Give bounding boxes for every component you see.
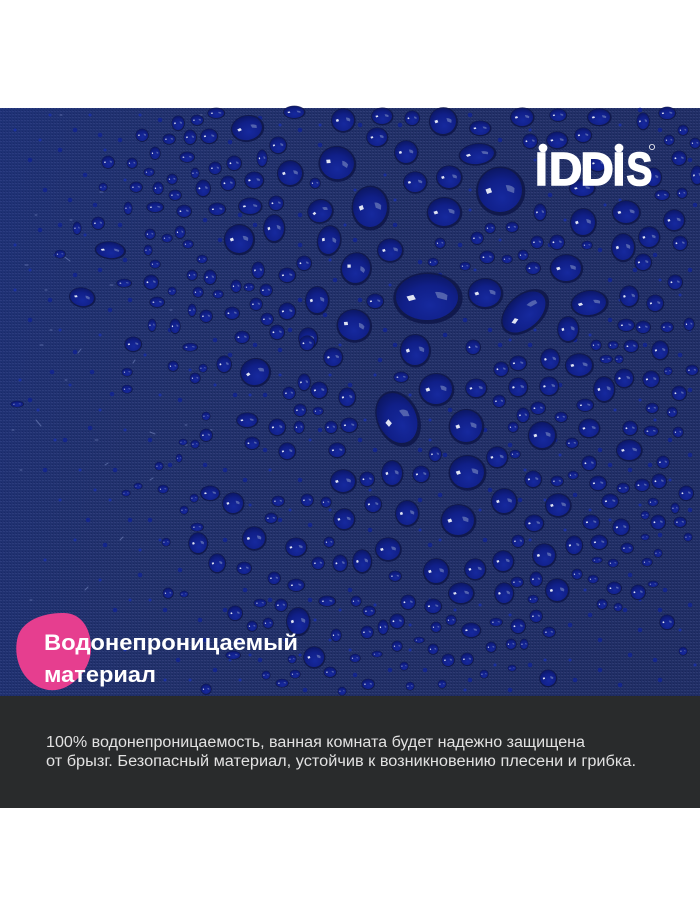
dark description panel [0,696,700,808]
pink accent blob [16,613,91,690]
heading: материал [44,662,156,687]
logo: IDDIS: S [626,144,652,195]
description text: 100% водонепроницаемость, ванная комната будет надежно защищена [46,734,585,751]
description text: от брызг. Безопасный материал, устойчив к возникновению плесени и грибка. [46,753,636,770]
small and medium drops [10,106,700,696]
heading [44,630,298,687]
tiny droplets [12,110,695,690]
description text [46,734,636,770]
logo: IDDIS: IDDI [535,143,625,195]
heading: Водонепроницаемый [44,630,298,655]
photo: blue fabric with water drops [0,106,700,696]
large drops [67,107,610,538]
